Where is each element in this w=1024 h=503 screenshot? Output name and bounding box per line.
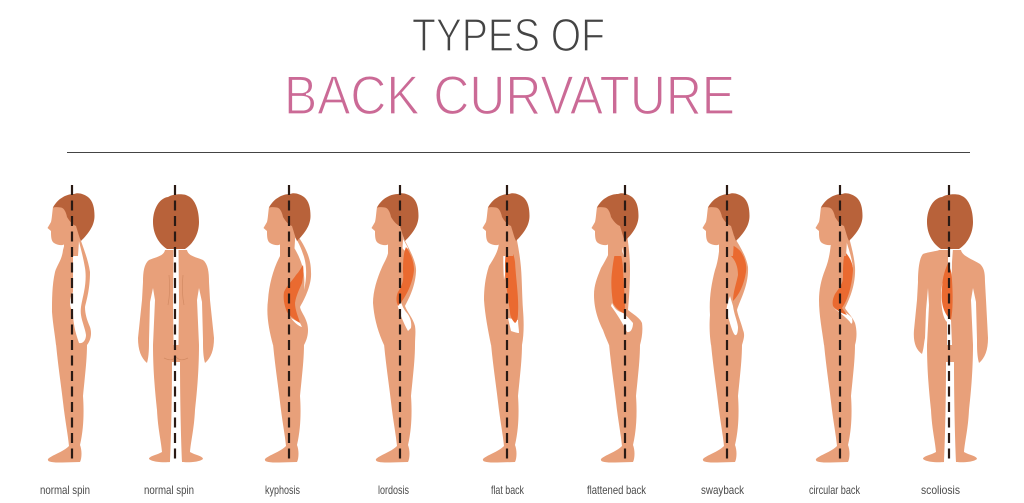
posture line	[71, 185, 73, 463]
spine channel	[173, 248, 179, 345]
title: back curvature: BACK CURVATURE	[284, 64, 735, 126]
spine channel	[503, 236, 519, 333]
figure: lordosis	[372, 185, 418, 463]
muscle	[396, 247, 414, 306]
spine channel	[727, 237, 738, 335]
posture line	[288, 185, 290, 463]
figure: kyphosis	[264, 185, 311, 463]
muscle	[611, 243, 625, 314]
figure: normal spine back view	[138, 185, 214, 463]
spine channel	[611, 230, 633, 332]
posture line	[506, 185, 508, 463]
label: normal spin back: normal spin	[144, 483, 194, 497]
label: flattened back: flattened back	[587, 483, 647, 497]
posture line	[839, 185, 841, 463]
title: types of: TYPES OF	[412, 9, 605, 61]
muscle	[833, 252, 853, 315]
spine channel	[941, 248, 953, 345]
label: scoliosis: scoliosis	[921, 483, 960, 497]
spine channel	[70, 228, 86, 343]
spine channel	[394, 228, 411, 331]
muscle	[284, 265, 303, 323]
label: circular back: circular back	[809, 483, 861, 497]
muscle	[727, 243, 746, 301]
posture line	[948, 185, 950, 463]
spine channel	[288, 233, 306, 290]
divider line	[67, 152, 970, 153]
label: lordosis: lordosis	[378, 483, 409, 497]
spine channel	[833, 232, 853, 324]
posture line	[624, 185, 626, 463]
label: flat back: flat back	[491, 483, 525, 497]
figure: flat back	[482, 185, 530, 463]
label: kyphosis: kyphosis	[265, 483, 300, 497]
posture line	[726, 185, 728, 463]
posture line	[174, 185, 176, 463]
label: normal spin: normal spin	[40, 483, 90, 497]
figure: circular back	[816, 185, 862, 463]
figure: normal spine side view	[48, 185, 94, 463]
figure: flattened back	[592, 185, 642, 463]
figure: swayback	[702, 185, 750, 463]
muscle	[505, 244, 518, 323]
label: swayback: swayback	[701, 483, 745, 497]
figure: scoliosis	[914, 185, 988, 463]
muscle	[942, 263, 953, 320]
labels	[40, 483, 960, 497]
posture line	[399, 185, 401, 463]
